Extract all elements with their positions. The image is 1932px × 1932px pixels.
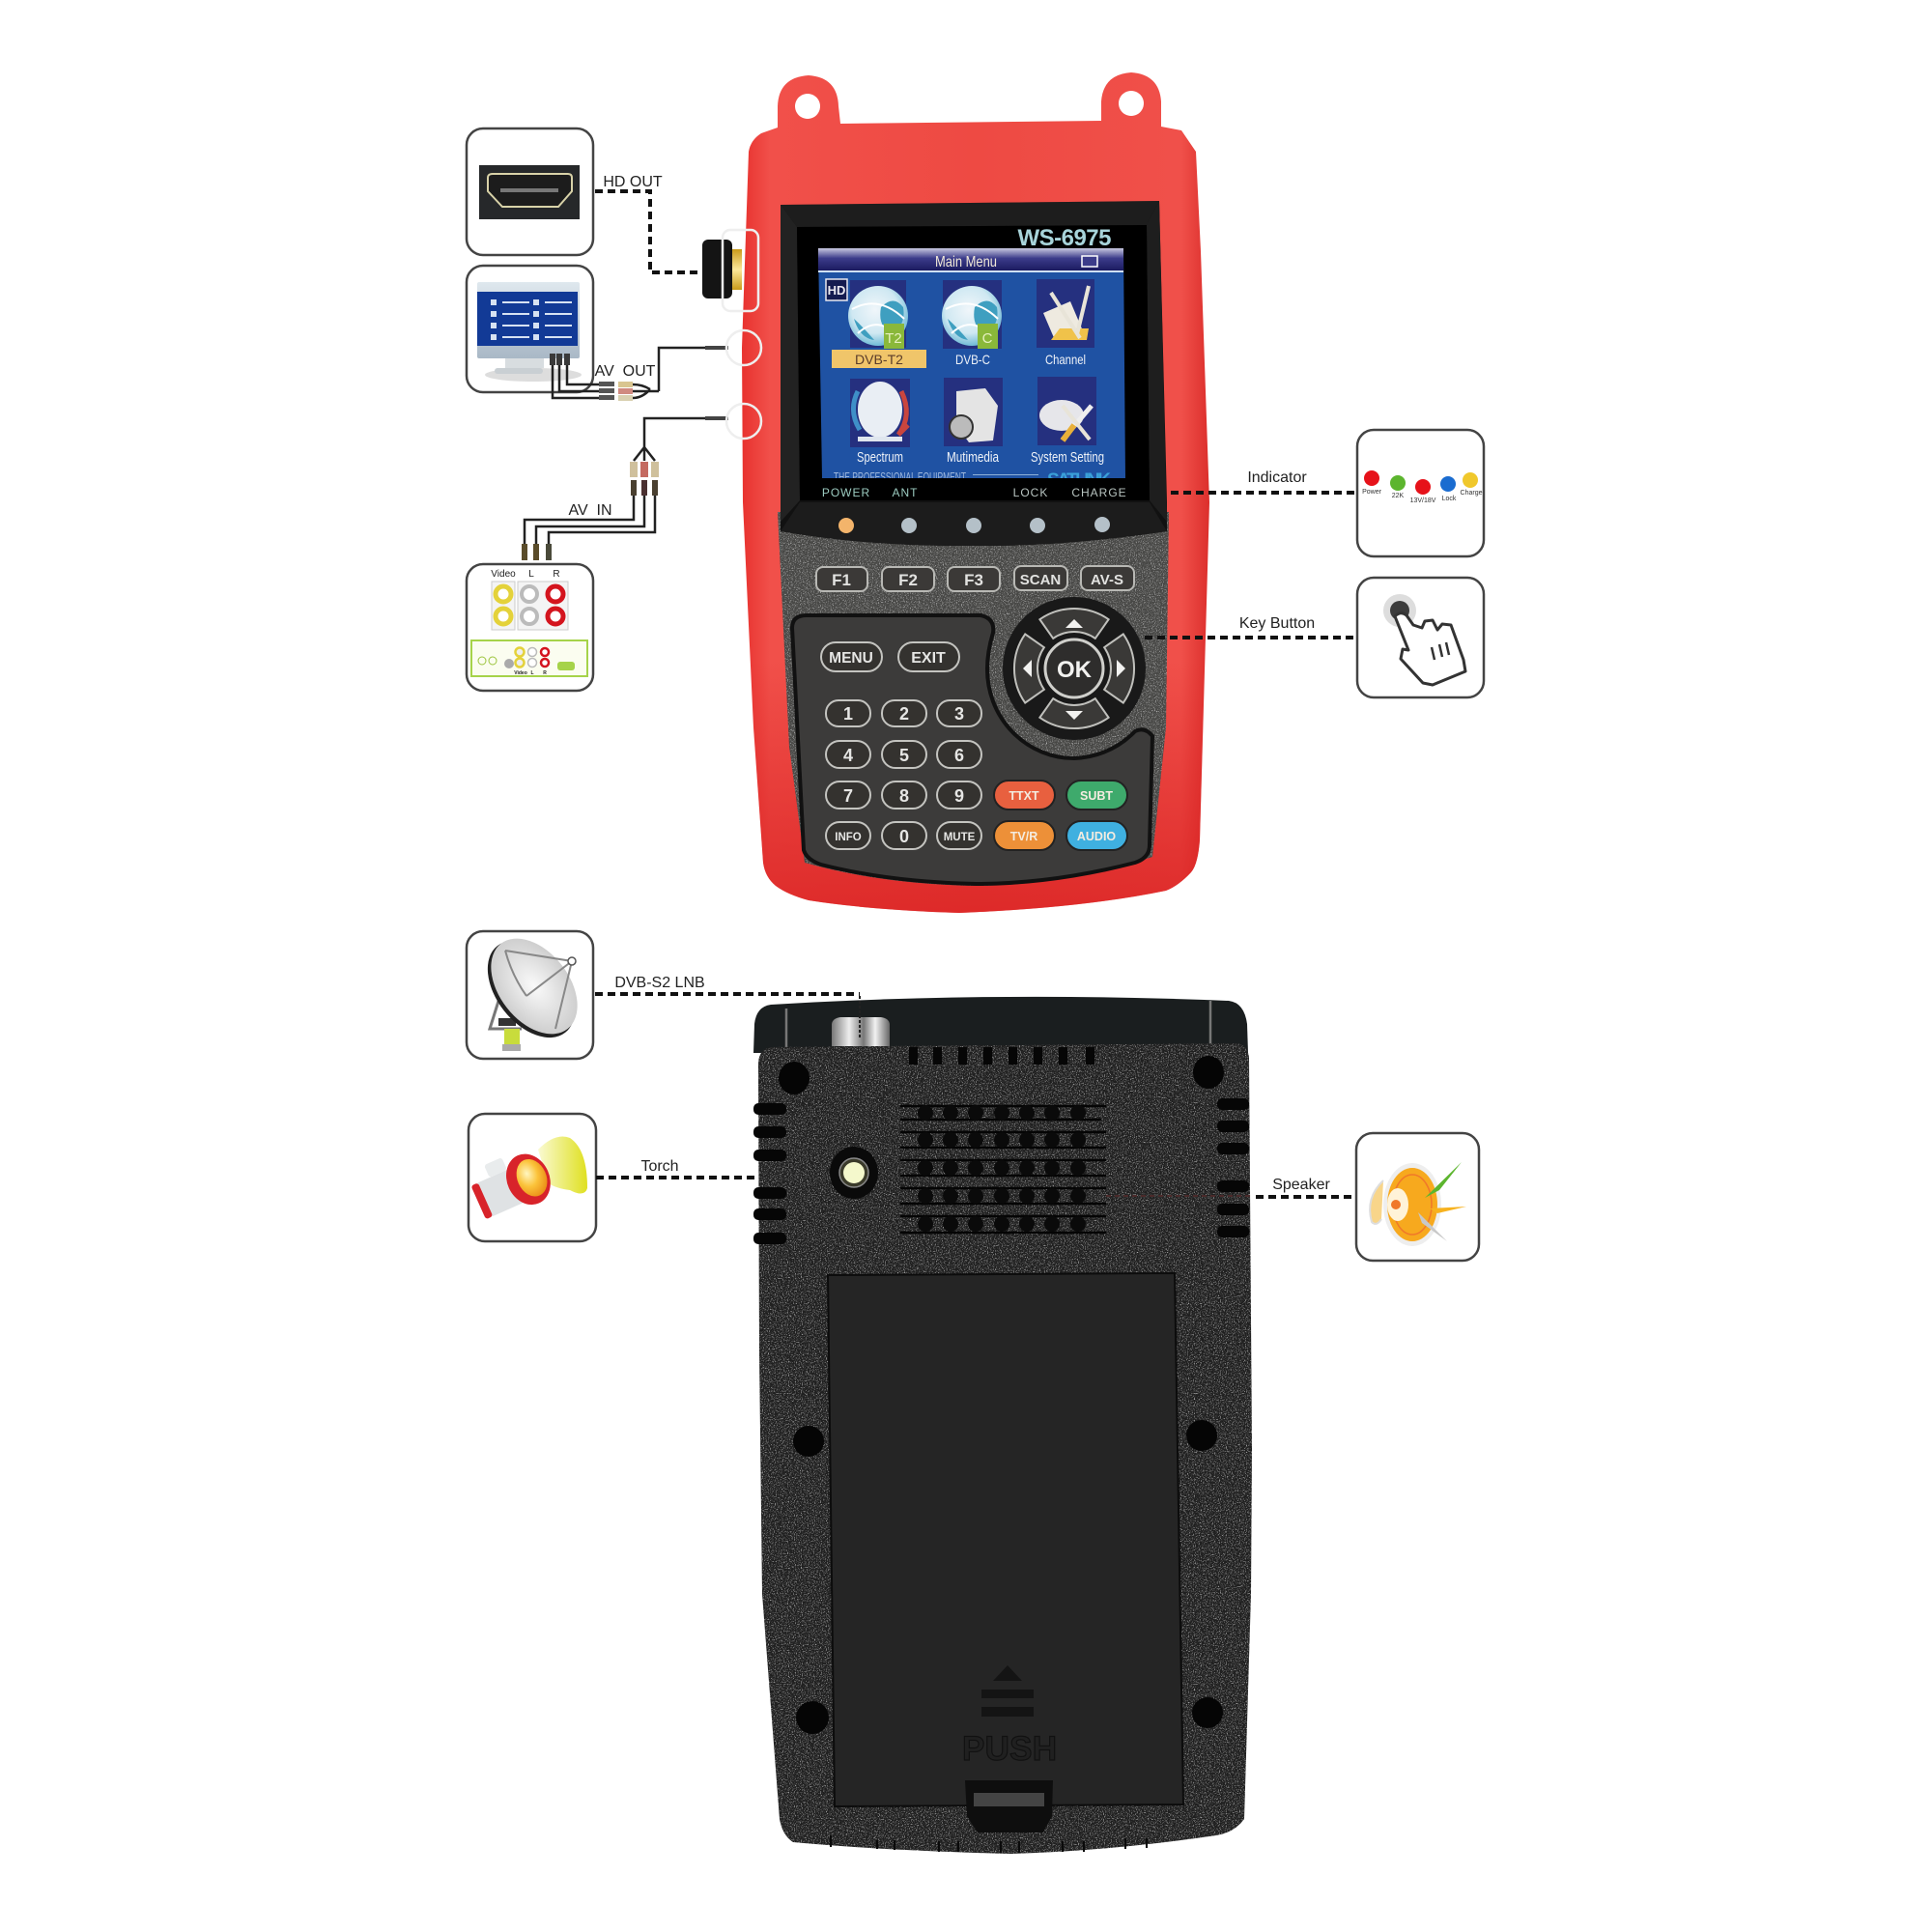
menu highlight and labels: Channel — [1045, 352, 1086, 367]
push text: PUSH — [962, 1730, 1057, 1768]
indicator lights — [838, 517, 1110, 533]
device: front view in red case — [742, 72, 1209, 913]
panel: monitor — [467, 266, 593, 392]
menu highlight and labels: System Setting — [1031, 449, 1104, 466]
main shell — [758, 1043, 1252, 1854]
HDMI plug with port outline — [702, 230, 758, 311]
indicator names: LOCK — [1013, 486, 1048, 499]
panel: speaker — [1356, 1133, 1479, 1261]
callout: Key Button: Key Button — [1239, 615, 1315, 632]
indicator names — [822, 486, 1127, 499]
screen bezel — [781, 201, 1167, 546]
callout: Speaker: Speaker — [1272, 1177, 1330, 1193]
red rubber case — [742, 72, 1209, 913]
keypad recess — [792, 615, 1152, 884]
model name: WS-6975 — [1018, 225, 1111, 251]
coloured keys: SUBT — [1080, 789, 1113, 803]
port outline: AV out — [726, 330, 761, 365]
panel: AV input jacks: L — [528, 569, 534, 580]
LCD screen: Main Menu — [935, 254, 997, 270]
panel: indicator lights: Charge — [1461, 490, 1483, 497]
panel: indicator lights: 13V/18V — [1410, 497, 1436, 504]
coloured keys: TTXT — [1009, 789, 1039, 803]
coloured keys: TV/R — [1010, 830, 1037, 843]
AV IN cables and label: AV IN — [568, 502, 612, 519]
keypad buttons: MENU — [829, 650, 873, 667]
bottom edge notches — [831, 1835, 1147, 1853]
connector — [832, 1017, 890, 1046]
torch LED — [830, 1147, 878, 1199]
panel: HD OUT port — [467, 128, 593, 255]
keypad buttons: 8 — [899, 786, 909, 806]
menu highlight and labels — [832, 350, 1104, 466]
keypad buttons: 9 — [954, 786, 964, 806]
battery cover — [828, 1273, 1183, 1806]
function keys: F1 — [832, 571, 851, 589]
icon: system setting — [1039, 400, 1092, 440]
keypad buttons: 4 — [843, 746, 853, 765]
keypad buttons: INFO — [835, 832, 862, 843]
callout: Indicator: Indicator — [1247, 469, 1307, 486]
menu highlight and labels: Spectrum — [857, 449, 903, 466]
keypad buttons: 7 — [843, 786, 853, 806]
AV IN cables and label — [522, 416, 728, 560]
icon: DVB-C globe — [942, 286, 1002, 349]
faceplate — [778, 512, 1169, 886]
icon: channel — [1043, 286, 1089, 340]
function keys — [816, 566, 1134, 591]
d-pad — [1003, 597, 1146, 740]
function keys: F3 — [964, 571, 983, 589]
device: rear view — [753, 997, 1252, 1854]
panel: indicator lights: Lock — [1442, 496, 1457, 502]
menu highlight and labels: Mutimedia — [947, 449, 1000, 466]
coloured keys — [994, 781, 1127, 850]
indicator names: ANT — [893, 486, 918, 499]
port outline: AV in — [726, 404, 761, 439]
HD badge — [826, 279, 847, 300]
callout: DVB-S2 LNB: DVB-S2 LNB — [614, 975, 705, 991]
callout: Torch: Torch — [640, 1158, 679, 1175]
menu highlight and labels: DVB-C — [955, 352, 990, 367]
icon: spectrum — [853, 382, 908, 441]
keypad buttons: MUTE — [944, 832, 976, 843]
screw holes — [779, 1056, 1224, 1734]
keypad buttons: 1 — [843, 704, 853, 724]
LCD screen — [818, 248, 1125, 491]
icon: DVB-T2 globe: T2 — [885, 330, 902, 347]
line into connector — [859, 996, 861, 1038]
panel: key button hand — [1357, 578, 1484, 697]
HD badge: HD — [828, 283, 845, 298]
icon: multimedia — [950, 388, 998, 442]
panel: indicator lights — [1357, 430, 1484, 556]
coloured keys: AUDIO — [1077, 830, 1116, 843]
LCD screen: SATLINK — [1047, 470, 1111, 491]
AV OUT cables and label — [550, 346, 728, 401]
top vent notches — [909, 1047, 1094, 1065]
d-pad: OK — [1057, 657, 1093, 683]
panel: AV input jacks: R — [543, 670, 547, 676]
panel: AV input jacks — [467, 564, 593, 691]
panel: AV input jacks: Video — [514, 670, 527, 676]
panel: indicator lights: 22K — [1392, 493, 1405, 499]
AV OUT cables and label: AV OUT — [595, 363, 656, 380]
keypad buttons: EXIT — [911, 650, 946, 667]
speaker grille — [900, 1105, 1106, 1233]
label and line: HD OUT: HD OUT — [603, 174, 663, 190]
panel: AV input jacks: R — [553, 569, 560, 580]
icon: DVB-C globe: C — [982, 330, 993, 347]
side vent slots — [753, 1098, 1249, 1244]
panel: indicator lights: Power — [1362, 489, 1382, 496]
keypad buttons: 6 — [954, 746, 964, 765]
label and line: HD OUT — [595, 174, 702, 272]
keypad buttons: 3 — [954, 704, 964, 724]
keypad buttons: 0 — [899, 827, 909, 846]
menu highlight and labels: DVB-T2 — [855, 352, 903, 367]
keypad buttons — [821, 642, 1127, 850]
LCD screen: THE PROFESSIONAL EQUIPMENT — [834, 469, 966, 484]
function keys: F2 — [898, 571, 918, 589]
function keys: SCAN — [1020, 572, 1061, 588]
battery latch — [965, 1780, 1053, 1833]
icon: DVB-T2 globe — [848, 286, 908, 349]
indicator names: POWER — [822, 486, 870, 499]
panel: AV input jacks: L — [530, 670, 534, 676]
panel: torch — [466, 1114, 596, 1241]
push arrow — [981, 1665, 1034, 1717]
panel: AV input jacks: Video — [491, 569, 516, 580]
top housing — [753, 997, 1248, 1053]
keypad buttons: 2 — [899, 704, 909, 724]
panel: satellite dish — [467, 923, 595, 1059]
keypad buttons: 5 — [899, 746, 909, 765]
indicator names: CHARGE — [1071, 486, 1127, 499]
function keys: AV-S — [1091, 572, 1123, 588]
